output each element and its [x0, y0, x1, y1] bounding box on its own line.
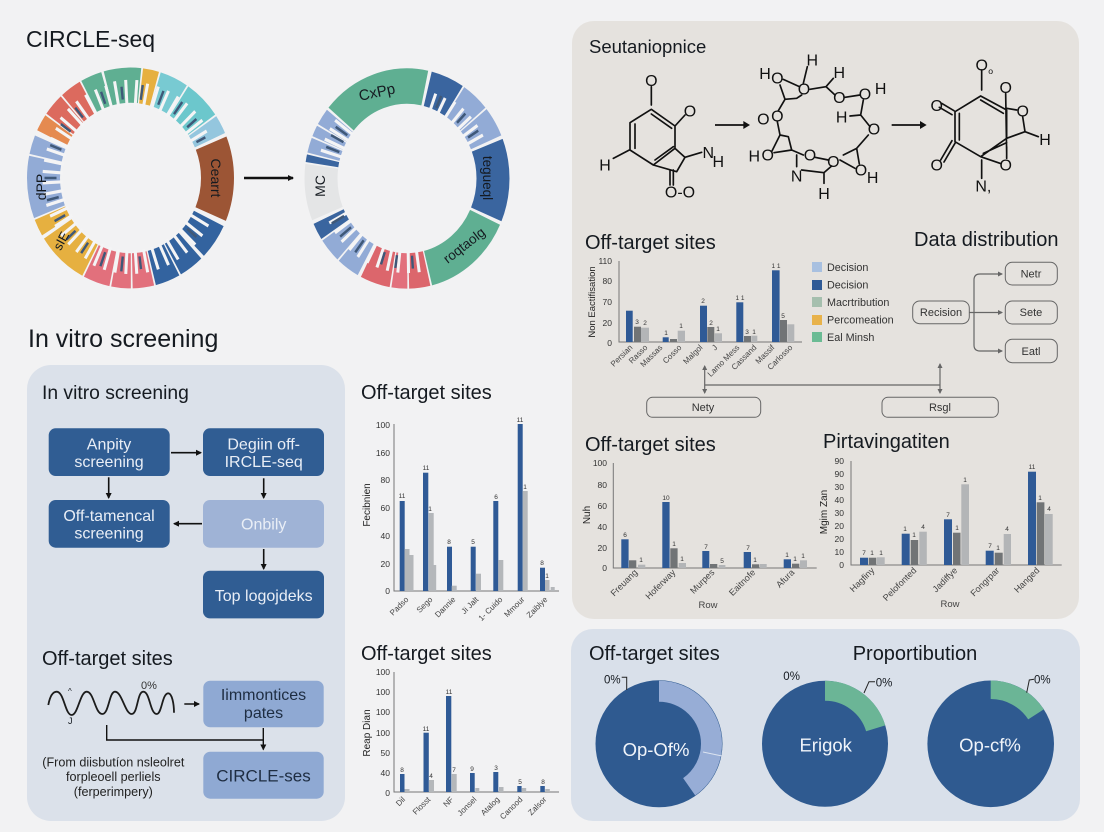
node: Recision: Recision: [920, 307, 962, 319]
y tick labels: 20: [835, 521, 844, 531]
value labels: 5: [518, 779, 522, 786]
x labels: [394, 795, 549, 821]
pie chart 3: [927, 674, 1054, 807]
title: CIRCLE-seq: CIRCLE-seq: [26, 26, 155, 52]
flow box: Degiin off: [203, 428, 324, 476]
axes: [613, 463, 817, 568]
molecule 2: O: [827, 154, 840, 171]
x labels: Ji Jalt: [460, 595, 481, 616]
y tick labels: 0: [385, 586, 390, 596]
value labels: 7: [862, 550, 866, 557]
flow box: Iimmontices pates: pates: [244, 705, 283, 722]
y tick labels: [598, 256, 612, 348]
value labels: 1: [912, 532, 916, 539]
value labels: 1: [523, 484, 527, 491]
arrow between rings: [244, 177, 293, 179]
pie chart 1: [596, 674, 722, 807]
bars: [400, 696, 550, 792]
flow box: Off-tamencal screening: Off-tamencal: [63, 508, 155, 525]
x labels: Dannie: [433, 595, 458, 619]
arrowhead: [743, 121, 750, 129]
value labels: 8: [447, 539, 451, 546]
node: Netr: Netr: [1021, 268, 1042, 280]
flow box: Anpity screening: Anpity: [87, 436, 131, 454]
flow box: Degiin off: Degiin off-: [227, 436, 300, 454]
value labels: [399, 417, 549, 580]
y tick labels: 0: [602, 563, 607, 573]
y tick labels: 0: [385, 788, 390, 798]
node: Recision: [913, 301, 969, 324]
value labels: 7: [746, 545, 750, 552]
molecule 2: H: [834, 65, 845, 82]
molecule 2: O: [798, 82, 810, 99]
value labels: 5: [720, 558, 724, 565]
y axis title: Non Eactifisation: [587, 266, 598, 338]
value labels: 5: [781, 313, 785, 320]
value labels: 1: [963, 477, 967, 484]
x labels: Fongrpar: [969, 565, 1001, 598]
value labels: 4: [429, 773, 433, 780]
y tick labels: 60: [598, 501, 607, 511]
icon: wave signal: J: [68, 716, 72, 726]
circular diagram: right ring: [286, 48, 528, 309]
cross connector: [705, 364, 940, 393]
connector arrows: [107, 725, 263, 750]
x labels: Hagfiny: [848, 565, 877, 594]
value labels: 11: [446, 689, 453, 696]
bars: [626, 270, 794, 342]
legend: Percomeation: [827, 314, 894, 326]
flow box: Iimmontices pates: Iimmontices: [221, 687, 306, 704]
molecule 1: N: [703, 145, 714, 162]
chart: off-target sites, upper: [361, 382, 559, 623]
y axis title: Mgim Zan: [819, 490, 830, 534]
value labels: 10: [662, 495, 670, 502]
x labels: Afura: [774, 567, 796, 590]
flow box: CIRCLE-ses: CIRCLE-ses: [216, 766, 311, 786]
chart: off-target sites with legend: [585, 232, 894, 379]
y tick labels: 70: [603, 297, 612, 307]
molecule 1: H: [713, 154, 724, 171]
chart: off-target sites, lower: [361, 643, 559, 821]
circular diagram: left ring: [24, 64, 237, 292]
pie label: Op-cf%: [959, 735, 1021, 756]
x labels: [609, 567, 796, 601]
chemical structures: [599, 53, 1051, 203]
molecule 2: N: [791, 168, 802, 185]
value labels: 1: [879, 550, 883, 557]
value labels: 1 1: [771, 263, 781, 270]
molecule 1: [599, 73, 724, 201]
panel heading: Seutaniopnice: Seutaniopnice: [589, 36, 706, 57]
flow box: Onbily: Onbily: [241, 516, 286, 534]
y tick labels: 100: [376, 667, 390, 677]
x axis title: Row: [698, 600, 718, 611]
arrow to Iimmontices box: [184, 703, 199, 705]
value labels: 11: [517, 417, 524, 424]
molecule 3: [930, 57, 1051, 195]
value labels: 8: [540, 560, 544, 567]
molecule 1: O: [684, 103, 696, 120]
value labels: 1: [870, 550, 874, 557]
x labels: Atalog: [479, 795, 501, 817]
ring label: grey segment: MC: [312, 175, 328, 197]
y tick labels: 100: [376, 420, 390, 430]
molecule 2: O: [833, 90, 846, 107]
flow box: Anpity screening: [49, 428, 170, 476]
chart heading: Off-target sites: [361, 382, 492, 404]
value labels: 1: [752, 329, 756, 336]
value labels: 7: [704, 544, 708, 551]
flow arrows: [109, 453, 264, 569]
value labels: [400, 689, 545, 786]
value labels: 1: [903, 526, 907, 533]
molecule 3: O: [975, 57, 988, 74]
value labels: 1: [679, 323, 683, 330]
ring label: left blue segment: dPP: [33, 174, 49, 200]
node: Sete: [1005, 301, 1057, 324]
panel: in vitro screening: [27, 365, 345, 821]
chart: Pirtavingatiten: [819, 431, 1062, 610]
molecule 2: O: [771, 108, 784, 125]
node: Eatl: [1005, 339, 1057, 363]
legend: Decision: [827, 280, 868, 292]
y tick labels: 40: [835, 495, 844, 505]
y tick labels: 60: [381, 503, 390, 513]
chart: off-target sites, panel lower left: [582, 434, 817, 611]
x labels: J: [710, 343, 719, 352]
bars: [860, 472, 1053, 565]
value labels: 4: [1047, 506, 1051, 513]
node: Nety: [647, 397, 761, 417]
pie chart 2: [762, 671, 892, 807]
x labels: Carlosso: [766, 343, 795, 372]
molecule 1: H: [599, 158, 611, 175]
axes: [851, 461, 1062, 565]
x labels: Murpes: [688, 567, 717, 596]
molecule 2: O: [868, 121, 880, 138]
molecule 1: O-O: [665, 184, 695, 201]
molecule 2: O: [771, 71, 784, 88]
y tick labels: 50: [381, 748, 390, 758]
flow box: Top logojdeks: [203, 571, 324, 618]
arrowhead: [920, 121, 927, 129]
value labels: 6: [623, 532, 627, 539]
x labels: Hanged: [1012, 565, 1041, 595]
molecule 2: H: [749, 149, 760, 166]
molecule 3: H: [1039, 132, 1051, 149]
node: Netr: [1005, 262, 1057, 285]
x labels: Hoferway: [643, 567, 678, 601]
x labels: 1- Cuido: [477, 595, 505, 623]
legend: Eal Minsh: [827, 332, 874, 344]
x labels: Pelofonted: [881, 565, 918, 603]
x axis title: Row: [940, 599, 960, 610]
value labels: 8: [400, 767, 404, 774]
value labels: 4: [1005, 526, 1009, 533]
y tick labels: 30: [835, 508, 844, 518]
flow box: CIRCLE-ses: [203, 752, 324, 799]
value labels: 2: [643, 320, 647, 327]
value labels: 9: [470, 766, 474, 773]
molecule 2: H: [867, 170, 878, 187]
heading: Proportibution: Proportibution: [853, 643, 977, 665]
y tick labels: 100: [376, 707, 390, 717]
x labels: Eaitnofe: [727, 567, 757, 598]
value labels: 2: [709, 320, 713, 327]
arrow: [892, 122, 923, 127]
value labels: 1 1: [735, 295, 745, 302]
x labels: Massif: [754, 343, 777, 366]
y tick labels: 40: [381, 531, 390, 541]
bars: [621, 502, 807, 568]
heading: Data distribution: [914, 229, 1059, 251]
node: Sete: Sete: [1020, 307, 1042, 319]
y tick labels: [835, 456, 844, 570]
value labels: 1: [996, 545, 1000, 552]
value labels: 1: [955, 525, 959, 532]
molecule 2: O: [855, 162, 867, 179]
y tick labels: 100: [376, 687, 390, 697]
value labels: 2: [701, 298, 705, 305]
value labels: 1: [428, 506, 432, 513]
icon: wave signal: [48, 680, 174, 726]
y tick labels: 0: [607, 338, 612, 348]
flow box: Off-tamencal screening: screening: [74, 525, 144, 542]
x labels: Jonsel: [456, 795, 479, 818]
flow box: Iimmontices pates: [203, 681, 324, 727]
value labels: 1: [785, 552, 789, 559]
molecule 2: [749, 53, 886, 203]
y axis title: Nuh: [582, 506, 593, 524]
value labels: [635, 263, 785, 337]
x labels: Flosst: [411, 795, 433, 817]
value labels: 1: [664, 330, 668, 337]
flow box: Off-tamencal screening: [49, 500, 170, 548]
y tick labels: 80: [598, 480, 607, 490]
x labels: Zaiblye: [525, 595, 550, 620]
x labels: Jadiffye: [931, 565, 959, 594]
x labels: Cosso: [661, 343, 684, 365]
x labels: Sego: [415, 595, 435, 615]
chart heading: Off-target sites: [585, 232, 716, 254]
x labels: Zalsor: [526, 795, 549, 817]
value labels: 1: [793, 556, 797, 563]
y tick labels: [376, 667, 390, 798]
ring label: yellow segment: sIE: [50, 229, 72, 253]
y tick labels: 30: [835, 482, 844, 492]
value labels: 5: [471, 539, 475, 546]
value labels: [623, 495, 805, 565]
axes: [619, 261, 802, 342]
value labels: 1: [672, 541, 676, 548]
icon: wave signal: 0%: [141, 680, 157, 692]
y tick labels: 0: [839, 560, 844, 570]
flow box: Onbily: [203, 500, 324, 548]
panel: proportions: [571, 629, 1080, 821]
chart heading: Pirtavingatiten: [823, 431, 950, 453]
pie label: Erigok: [799, 735, 853, 756]
value labels: 1: [801, 553, 805, 560]
molecule 2: H: [759, 66, 771, 83]
bars: [400, 424, 555, 591]
value labels: 1: [1038, 495, 1042, 502]
flow box: Degiin off: IRCLE-seq: [225, 454, 303, 471]
note text: (ferperimpery): [74, 785, 153, 799]
callout right: 0%: [876, 678, 892, 690]
ring label: green top segment: CxPp: [357, 80, 397, 105]
molecule 2: O: [757, 112, 770, 129]
value labels: 11: [423, 465, 430, 472]
y tick labels: 20: [598, 543, 607, 553]
axes: [394, 424, 559, 591]
x labels: Massas: [639, 343, 664, 369]
ring label: brown segment: Cearrt: [208, 159, 224, 198]
y axis title: Fecibnien: [362, 483, 373, 527]
value labels: 3: [635, 319, 639, 326]
x labels: Freuang: [609, 567, 639, 598]
x labels: Canood: [498, 795, 524, 821]
molecule 2: H: [807, 53, 818, 70]
y tick labels: 100: [376, 728, 390, 738]
x labels: NF: [442, 795, 455, 809]
node: Rsgl: Rsgl: [929, 402, 951, 414]
x labels: [609, 343, 795, 379]
sub-heading: Off-target sites: Off-target sites: [42, 648, 173, 670]
ring label: right blue segment: tegueql: [480, 156, 495, 200]
node: Rsgl: [882, 397, 998, 417]
value labels: 11: [399, 493, 406, 500]
molecule 3: O: [999, 157, 1012, 174]
note text: (From diisbutíon nsleolret: [42, 756, 185, 770]
value labels: 11: [423, 726, 430, 733]
flow box: Top logojdeks: Top logojdeks: [215, 588, 313, 605]
molecule 3: o: [988, 66, 993, 76]
y tick labels: 80: [603, 276, 612, 286]
y tick labels: 160: [376, 448, 390, 458]
value labels: 6: [494, 494, 498, 501]
note text: forpleoell perliels: [66, 770, 161, 784]
molecule 3: O: [999, 80, 1012, 97]
y tick labels: 10: [835, 547, 844, 557]
value labels: 4: [921, 524, 925, 531]
callout left: 0%: [783, 671, 800, 683]
panel heading: In vitro screening: [42, 383, 189, 404]
value labels: 1: [716, 326, 720, 333]
y tick labels: 20: [835, 534, 844, 544]
x labels: Mmour: [502, 595, 527, 619]
molecule 3: O: [930, 157, 943, 174]
y tick labels: 90: [835, 469, 844, 479]
y tick labels: 110: [598, 256, 612, 266]
y tick labels: 40: [381, 768, 390, 778]
flow box: Anpity screening: screening: [74, 454, 144, 471]
y tick labels: 40: [598, 522, 607, 532]
heading: Off-target sites: Off-target sites: [589, 643, 720, 665]
arrow: [715, 122, 747, 127]
value labels: [862, 464, 1051, 557]
x labels: Persian: [609, 343, 634, 369]
value labels: 3: [745, 329, 749, 336]
value labels: 11: [1029, 464, 1036, 471]
value labels: 7: [946, 512, 950, 519]
icon: wave signal: ^: [68, 687, 72, 696]
x labels: Lamo Mess: [706, 343, 741, 379]
node: Nety: Nety: [692, 402, 715, 414]
value labels: 1: [639, 557, 643, 564]
node: Eatl: Eatl: [1022, 346, 1040, 358]
x labels: Padso: [388, 595, 411, 617]
y tick labels: 20: [603, 318, 612, 328]
molecule 3: O: [1016, 103, 1029, 120]
y tick labels: 100: [593, 458, 607, 468]
y tick labels: [593, 458, 607, 573]
x labels: [388, 595, 550, 623]
y tick labels: [376, 420, 390, 596]
axes: [394, 672, 559, 792]
molecule 2: H: [818, 186, 830, 203]
ring label: lower green segment: roqtaolg: [440, 225, 488, 266]
note text: [42, 756, 185, 799]
y tick labels: 90: [835, 456, 844, 466]
value labels: 8: [541, 779, 545, 786]
value labels: 1: [680, 556, 684, 563]
molecule 3: N,: [975, 178, 991, 195]
flow diagram: data distribution: [647, 229, 1059, 417]
y axis title: Reap Dian: [362, 709, 373, 757]
heading: In vitro screening: In vitro screening: [28, 325, 218, 353]
y tick labels: 80: [381, 475, 390, 485]
x labels: Dil: [394, 795, 407, 808]
x labels: Cassand: [730, 343, 758, 372]
molecule 2: O: [804, 147, 816, 164]
value labels: 3: [494, 765, 498, 772]
value labels: 7: [452, 767, 456, 774]
callout: 0%: [1034, 674, 1051, 686]
panel: upper right: [572, 21, 1079, 619]
value labels: 1: [753, 557, 757, 564]
y tick labels: 20: [381, 559, 390, 569]
chart heading: Off-target sites: [361, 643, 492, 665]
molecule 3: O: [930, 98, 943, 115]
legend: Decision: [827, 262, 868, 274]
callout: 0%: [604, 674, 621, 686]
connectors: [969, 274, 1002, 351]
molecule 2: H: [875, 81, 886, 98]
legend: Macrtribution: [827, 297, 889, 309]
value labels: 1: [545, 573, 549, 580]
molecule 2: O: [859, 86, 871, 103]
value labels: 7: [988, 543, 992, 550]
molecule 2: O: [761, 147, 774, 164]
chart heading: Off-target sites: [585, 434, 716, 456]
molecule 1: O: [645, 73, 658, 90]
molecule 2: H: [836, 109, 847, 126]
legend: [812, 262, 894, 344]
pie label: Op-Of%: [623, 739, 689, 760]
x labels: Rasso: [627, 343, 650, 365]
x labels: Malgol: [681, 343, 705, 366]
x labels: [848, 565, 1041, 603]
